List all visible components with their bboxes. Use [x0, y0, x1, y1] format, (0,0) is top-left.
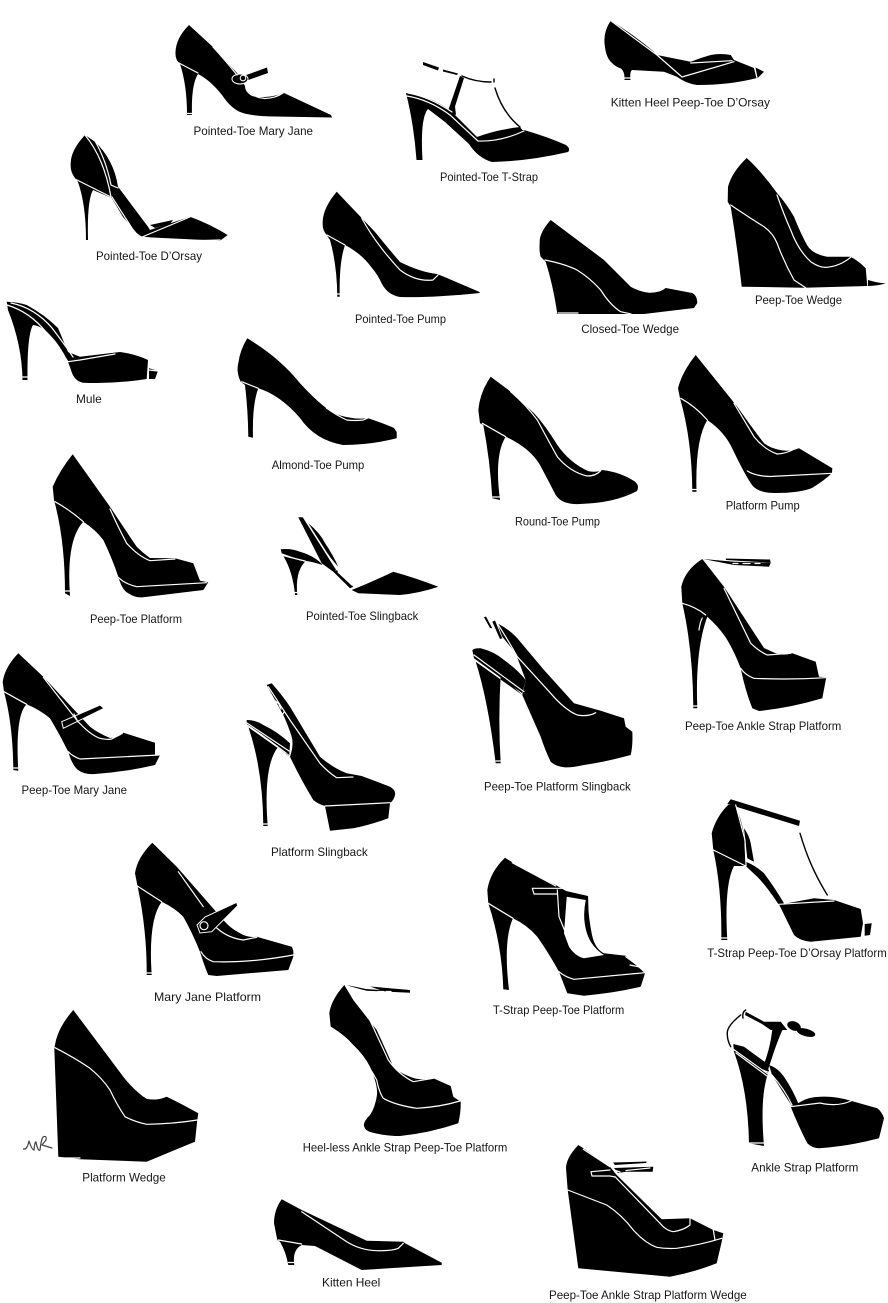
caption: Pointed-Toe Pump: [355, 312, 446, 326]
shoe: Mary Jane Platform: [135, 843, 293, 1004]
caption: Kitten Heel: [322, 1276, 380, 1290]
shoe: Platform Pump: [678, 355, 832, 512]
caption: Peep-Toe Wedge: [755, 293, 842, 307]
caption: Platform Slingback: [271, 845, 369, 859]
icon: artist signature: [24, 1136, 52, 1150]
caption: Pointed-Toe T-Strap: [440, 170, 538, 184]
shoe: T-Strap Peep-Toe D'Orsay Platform: [707, 799, 887, 960]
shoe: Peep-Toe Ankle Strap Platform: [681, 558, 841, 733]
shoe: Pointed-Toe Slingback: [281, 517, 438, 623]
shoe: Kitten Heel: [274, 1199, 442, 1290]
shoe: Peep-Toe Mary Jane: [3, 653, 160, 797]
caption: Platform Pump: [726, 498, 800, 512]
shoe: Peep-Toe Ankle Strap Platform Wedge: [549, 1145, 747, 1302]
shoe: Heel-less Ankle Strap Peep-Toe Platform: [303, 985, 507, 1155]
caption: Platform Wedge: [82, 1171, 166, 1185]
caption: Peep-Toe Platform: [90, 612, 182, 626]
caption: T-Strap Peep-Toe Platform: [493, 1003, 624, 1017]
caption: Heel-less Ankle Strap Peep-Toe Platform: [303, 1141, 507, 1155]
caption: Mule: [76, 392, 102, 406]
shoe: Pointed-Toe Mary Jane: [175, 25, 332, 138]
caption: Pointed-Toe Mary Jane: [194, 124, 313, 138]
caption: Peep-Toe Ankle Strap Platform Wedge: [549, 1288, 747, 1302]
shoe: Platform Slingback: [247, 683, 395, 859]
shoe: Kitten Heel Peep-Toe D'Orsay: [604, 21, 770, 110]
caption: Pointed-Toe D’Orsay: [96, 249, 202, 263]
caption: Closed-Toe Wedge: [581, 322, 679, 336]
shoe: Peep-Toe Platform: [53, 454, 208, 626]
caption: Pointed-Toe Slingback: [306, 609, 419, 623]
shoe: Platform Wedge: [24, 1010, 198, 1185]
caption: Peep-Toe Mary Jane: [22, 783, 127, 797]
caption: Peep-Toe Ankle Strap Platform: [685, 719, 841, 733]
caption: Peep-Toe Platform Slingback: [484, 780, 632, 794]
shoe: Closed-Toe Wedge: [539, 220, 697, 336]
shoe: T-Strap Peep-Toe Platform: [487, 858, 645, 1017]
shoe: Almond-Toe Pump: [238, 338, 397, 472]
shoe: Peep-Toe Wedge: [728, 158, 886, 307]
shoe: Peep-Toe Platform Slingback: [472, 616, 632, 794]
caption: Kitten Heel Peep-Toe D’Orsay: [611, 96, 770, 110]
shoe: Round-Toe Pump: [478, 377, 638, 529]
shoe: Ankle Strap Platform: [727, 1010, 884, 1175]
caption: Ankle Strap Platform: [751, 1161, 858, 1175]
shoe: Pointed-Toe Pump: [323, 192, 480, 326]
shoe: Pointed-Toe D'Orsay: [71, 135, 228, 263]
caption: Almond-Toe Pump: [272, 458, 365, 472]
shoe: Pointed-Toe T-Strap: [406, 62, 569, 184]
caption: Mary Jane Platform: [154, 990, 261, 1004]
shoe: Mule: [7, 302, 158, 406]
caption: Round-Toe Pump: [515, 515, 600, 529]
